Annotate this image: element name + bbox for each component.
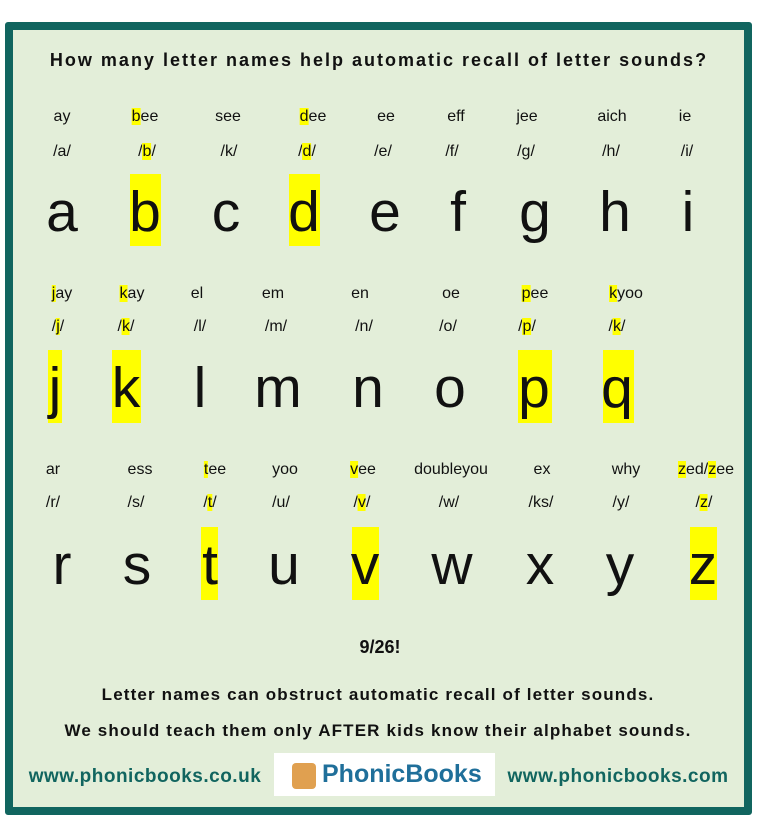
logo — [274, 753, 495, 796]
text: bee — [132, 108, 158, 125]
text: /k/ — [609, 318, 625, 335]
text: v — [351, 533, 379, 597]
row 1: a-i — [46, 108, 694, 244]
row 2: j-q — [47, 285, 643, 420]
text: /ks/ — [529, 494, 553, 511]
text: d — [288, 180, 320, 244]
text: ex — [534, 461, 550, 478]
text: f — [450, 180, 466, 244]
highlight boxes — [48, 174, 717, 600]
text: /i/ — [681, 143, 693, 160]
text: /s/ — [128, 494, 144, 511]
text: yoo — [272, 461, 298, 478]
text: pee — [522, 285, 548, 302]
text: /p/ — [518, 318, 536, 335]
text: w — [431, 533, 473, 597]
text: /r/ — [46, 494, 60, 511]
message text: We should teach them only AFTER kids know their alphabet sounds. — [64, 721, 692, 740]
text: en — [351, 285, 369, 302]
text: /n/ — [355, 318, 373, 335]
text: /o/ — [439, 318, 457, 335]
text: /w/ — [439, 494, 459, 511]
text: t — [202, 533, 218, 597]
text: ee — [377, 108, 395, 125]
message text — [64, 685, 692, 740]
text: zed/zee — [678, 461, 734, 478]
url uk: www.phonicbooks.co.uk — [29, 766, 261, 787]
text: z — [689, 533, 717, 597]
text: n — [352, 356, 384, 420]
text: oe — [442, 285, 460, 302]
text: /b/ — [138, 143, 156, 160]
text: /g/ — [517, 143, 535, 160]
text: tee — [204, 461, 226, 478]
logo text: PhonicBooks — [322, 760, 482, 788]
text: vee — [350, 461, 376, 478]
text: doubleyou — [414, 461, 488, 478]
message text: Letter names can obstruct automatic recall of letter sounds. — [102, 685, 654, 704]
text: ar — [46, 461, 60, 478]
text: h — [599, 180, 631, 244]
text: /e/ — [374, 143, 392, 160]
text: kyoo — [609, 285, 643, 302]
text: jay — [52, 285, 72, 302]
text: a — [46, 180, 78, 244]
text: q — [601, 356, 633, 420]
text: i — [682, 180, 694, 244]
text: x — [526, 533, 554, 597]
text: y — [606, 533, 634, 597]
text: b — [129, 180, 161, 244]
text: k — [112, 356, 140, 420]
text: em — [262, 285, 284, 302]
text: /l/ — [194, 318, 206, 335]
text: m — [254, 356, 302, 420]
icon: reader — [292, 763, 316, 789]
text: s — [123, 533, 151, 597]
text: ay — [54, 108, 70, 125]
title: How many letter names help automatic recall of letter sounds? — [50, 50, 708, 70]
text: /k/ — [221, 143, 237, 160]
text: p — [518, 356, 550, 420]
url com: www.phonicbooks.com — [508, 766, 728, 787]
text: /a/ — [53, 143, 71, 160]
text: /k/ — [118, 318, 134, 335]
row 3: r-z — [46, 461, 734, 597]
text: /j/ — [52, 318, 64, 335]
text: u — [268, 533, 300, 597]
text: /f/ — [445, 143, 459, 160]
text: eff — [447, 108, 465, 125]
text: g — [519, 180, 551, 244]
text: /u/ — [272, 494, 290, 511]
text: e — [369, 180, 401, 244]
text: jee — [516, 108, 538, 125]
text: /v/ — [354, 494, 370, 511]
text: /m/ — [265, 318, 287, 335]
text: r — [53, 533, 71, 597]
result: 9/26: 9/26! — [359, 637, 401, 657]
text: /z/ — [696, 494, 712, 511]
text: /d/ — [298, 143, 316, 160]
text: /t/ — [203, 494, 217, 511]
text: c — [212, 180, 240, 244]
text: see — [215, 108, 241, 125]
text: el — [191, 285, 203, 302]
text: ie — [679, 108, 691, 125]
text: aich — [597, 108, 627, 125]
text: dee — [300, 108, 326, 125]
text: /h/ — [602, 143, 620, 160]
text: why — [612, 461, 640, 478]
text: /y/ — [613, 494, 629, 511]
text: o — [434, 356, 466, 420]
text: kay — [120, 285, 144, 302]
text: j — [49, 356, 61, 420]
text: l — [194, 356, 206, 420]
text: ess — [128, 461, 152, 478]
